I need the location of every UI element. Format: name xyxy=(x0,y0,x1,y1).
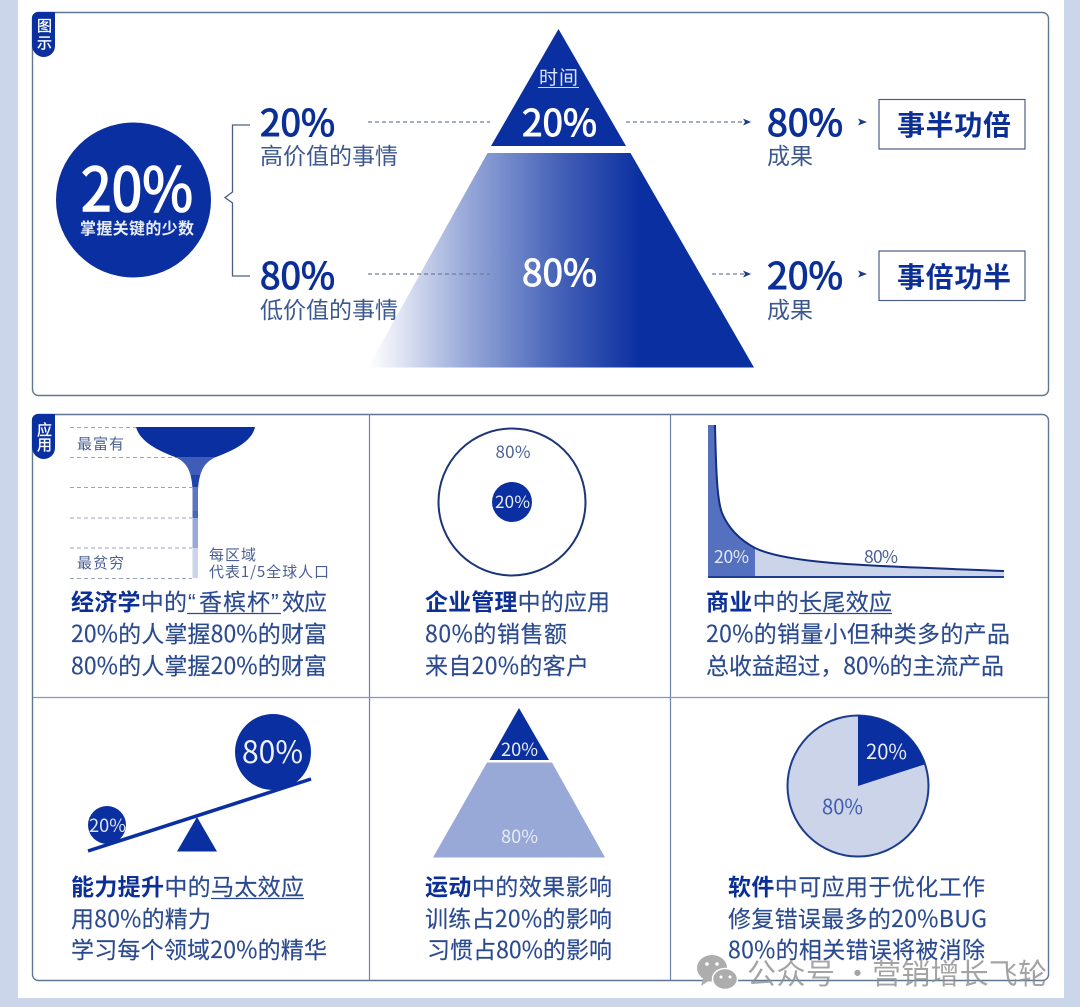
result: 80% xyxy=(767,93,843,171)
text: exercise: 运动中的效果影响 xyxy=(425,868,612,902)
text: Matthew effect xyxy=(71,868,327,965)
badge: 图示: 图 xyxy=(37,15,52,36)
circle: 20% key minority xyxy=(56,122,211,278)
text: Matthew effect: 能力提升中的马太效应 xyxy=(71,868,304,902)
chart: champagne glass: 每区域 xyxy=(209,544,256,565)
chart: concentric circles xyxy=(438,428,586,576)
text: enterprise management: 80%的销售额 xyxy=(425,615,567,649)
text: software: 修复错误最多的20%BUG xyxy=(728,900,987,934)
pyramid: bottom 80%: 80% xyxy=(522,243,597,297)
watermark: 公众号 xyxy=(747,951,835,993)
panel: applications xyxy=(32,414,1048,980)
box: 事半功倍 xyxy=(879,100,1025,149)
chart: small pyramid: 80% xyxy=(501,823,538,849)
cell: enterprise management xyxy=(425,428,610,681)
result: 20%: 20% xyxy=(767,246,843,300)
chart: long tail curve xyxy=(708,425,1004,577)
text: champagne glass: 20%的人掌握80%的财富 xyxy=(71,615,327,649)
cell: software xyxy=(728,716,987,965)
text: enterprise management: 企业管理中的应用 xyxy=(425,583,610,617)
cell: champagne glass effect xyxy=(70,427,329,681)
label: 20% high value: 高价值的事情 xyxy=(260,137,398,171)
label: 20% high value xyxy=(260,93,398,171)
panel: diagram xyxy=(32,12,1048,396)
badge: 应用 xyxy=(32,414,55,459)
box: 事半功倍: 事半功倍 xyxy=(897,104,1011,144)
chart: pie: 80% xyxy=(822,790,863,820)
chart: concentric circles: 80% xyxy=(496,438,530,463)
text: exercise: 训练占20%的影响 xyxy=(425,900,612,934)
bracket xyxy=(225,125,250,276)
label: 80% low value: 80% xyxy=(260,246,335,300)
text: exercise xyxy=(425,868,612,965)
text: enterprise management xyxy=(425,583,610,681)
chart: concentric circles: 20% xyxy=(495,488,530,513)
arrow: top result xyxy=(626,118,751,126)
result: 20%: 成果 xyxy=(767,291,813,325)
text: champagne glass: 香槟杯 xyxy=(199,583,270,617)
result: 80%: 80% xyxy=(767,93,843,147)
watermark xyxy=(697,951,1047,993)
chart: seesaw: 80% xyxy=(242,727,303,772)
text: champagne glass: 经济学中的 xyxy=(71,583,187,617)
text: champagne glass: 效应 xyxy=(282,583,327,617)
box: 事倍功半 xyxy=(879,251,1025,300)
text: software xyxy=(728,868,987,965)
chart: long tail curve: 20% xyxy=(714,544,749,569)
cell: exercise xyxy=(425,708,612,965)
chart: seesaw: 20% xyxy=(89,812,126,838)
chart: champagne glass xyxy=(70,427,329,582)
box: 事倍功半: 事倍功半 xyxy=(897,256,1011,296)
text: long tail: 商业中的长尾效应 xyxy=(706,583,892,617)
pyramid: top 20% time: 时间 xyxy=(539,63,578,90)
badge: 图示: 示 xyxy=(37,32,52,53)
icon: wechat xyxy=(697,955,738,990)
text: champagne glass: 80%的人掌握20%的财富 xyxy=(71,647,327,681)
arrow: to 事倍功半 xyxy=(858,270,867,278)
pyramid: top 20% time: 20% xyxy=(522,93,597,147)
chart: champagne glass: 最贫穷 xyxy=(77,552,124,573)
text: long tail: 20%的销量小但种类多的产品 xyxy=(706,615,1010,649)
badge: 应用: 用 xyxy=(37,434,52,455)
circle: 20% key minority: 20% xyxy=(81,142,193,229)
result: 20% xyxy=(767,246,843,325)
chart: pie: 20% xyxy=(866,735,907,765)
text: long tail: 总收益超过，80%的主流产品 xyxy=(706,647,1004,681)
text: champagne glass xyxy=(71,583,327,681)
result: 80%: 成果 xyxy=(767,137,813,171)
chart: small pyramid: 20% xyxy=(501,736,538,762)
text: enterprise management: 来自20%的客户 xyxy=(425,647,589,681)
chart: pie xyxy=(788,716,928,856)
label: 20% high value: 20% xyxy=(260,93,335,147)
text: software: 软件中可应用于优化工作 xyxy=(728,868,985,902)
chart: long tail curve: 80% xyxy=(864,544,898,569)
cell: Matthew effect xyxy=(71,714,327,965)
watermark: 营销增长飞轮 xyxy=(872,951,1047,993)
dashed connectors xyxy=(368,122,490,274)
arrow: to 事半功倍 xyxy=(858,118,867,126)
text: Matthew effect: 学习每个领域20%的精华 xyxy=(71,931,327,965)
text: Matthew effect: 用80%的精力 xyxy=(71,900,211,934)
chart: seesaw xyxy=(88,714,311,852)
badge: 应用: 应 xyxy=(37,419,52,440)
pyramid: top 20% time xyxy=(491,29,626,147)
text: champagne glass: ” xyxy=(271,589,279,615)
label: 80% low value: 低价值的事情 xyxy=(260,291,398,325)
chart: small pyramid xyxy=(433,708,605,858)
label: 80% low value xyxy=(260,246,398,325)
badge: 图示 xyxy=(32,12,55,57)
chart: champagne glass: 最富有 xyxy=(77,433,124,454)
arrow: bottom result xyxy=(712,270,751,278)
chart: champagne glass: 代表1/5全球人口 xyxy=(209,561,329,582)
watermark: · xyxy=(843,951,872,993)
cell: long tail xyxy=(706,425,1010,681)
pyramid: bottom 80% xyxy=(368,153,754,368)
text: champagne glass: “ xyxy=(188,589,196,615)
text: long tail xyxy=(706,583,1010,681)
circle: 20% key minority: 掌握关键的少数 xyxy=(80,215,194,239)
text: software: 80%的相关错误将被消除 xyxy=(728,931,985,965)
text: exercise: 习惯占80%的影响 xyxy=(427,931,612,965)
